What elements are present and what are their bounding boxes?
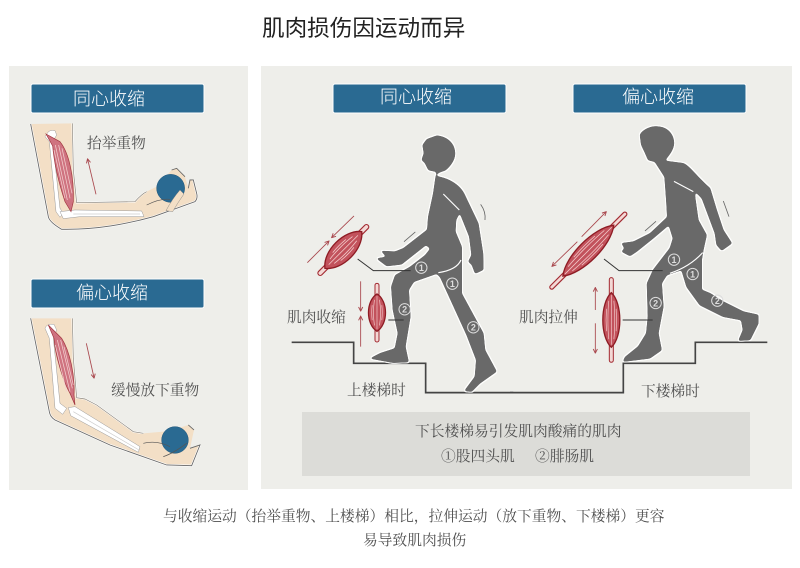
icon: arm lifting ball	[31, 123, 197, 229]
figure: descending stairs: 2	[715, 296, 720, 306]
title: 肌肉损伤因运动而异	[262, 16, 465, 41]
silhouette: man climbing	[369, 135, 497, 392]
humerus	[45, 130, 63, 217]
panel: stairs comparison	[261, 66, 792, 489]
muscle: calf stretched	[603, 278, 620, 362]
figure: climbing stairs	[292, 135, 513, 393]
label: slowly lower heavy object: 缓慢放下重物	[111, 379, 199, 400]
muscle: calf contracted	[368, 283, 385, 342]
callout: muscles sore after long descent: ②腓肠肌	[535, 445, 594, 466]
humerus	[45, 324, 67, 414]
panel: left arm comparison	[9, 66, 248, 490]
callout: muscles sore after long descent: 下长楼梯易引发肌肉酸痛的肌肉	[415, 420, 622, 441]
label: going upstairs: 上楼梯时	[347, 379, 406, 400]
badge: concentric contraction	[31, 84, 204, 113]
callout: muscles sore after long descent	[302, 412, 750, 476]
badge: eccentric contraction: 偏心收缩	[76, 283, 148, 303]
figure: climbing stairs: 1	[450, 279, 455, 289]
caption	[163, 505, 665, 550]
numbered markers	[650, 254, 723, 309]
label: lift heavy object: 抬举重物	[87, 132, 146, 153]
figure: descending stairs: 2	[653, 298, 658, 308]
forearm bones	[68, 407, 140, 452]
icon: blue ball	[157, 174, 185, 202]
badge: concentric contraction: 同心收缩	[73, 89, 145, 109]
badge: eccentric contraction	[31, 279, 204, 308]
figure: descending stairs: 1	[690, 269, 695, 279]
badge: eccentric contraction: 偏心收缩	[622, 87, 694, 107]
icon: arm lowering ball	[31, 318, 200, 466]
badge: concentric contraction: 同心收缩	[380, 87, 452, 107]
label: muscle stretch: 肌肉拉伸	[519, 306, 578, 327]
badge: eccentric contraction	[573, 84, 746, 113]
caption: 与收缩运动（抬举重物、上楼梯）相比，拉伸运动（放下重物、下楼梯）更容	[163, 505, 665, 526]
caption: 易导致肌肉损伤	[363, 529, 466, 550]
figure: descending stairs: 1	[671, 255, 676, 265]
numbered markers	[399, 262, 479, 333]
muscle: quadriceps stretched	[544, 206, 633, 295]
label: muscle contraction: 肌肉收缩	[287, 306, 346, 327]
stairs up	[292, 342, 513, 393]
badge: concentric contraction	[333, 84, 506, 113]
figure: climbing stairs: 1	[419, 263, 424, 273]
stairs down	[510, 342, 767, 393]
label: going downstairs: 下楼梯时	[641, 380, 700, 401]
figure: descending stairs	[510, 126, 767, 393]
figure: climbing stairs: 2	[471, 323, 476, 333]
icon: blue ball lowered	[162, 427, 188, 453]
callout: muscles sore after long descent: ①股四头肌	[441, 445, 515, 466]
silhouette: man descending	[621, 126, 759, 362]
figure: climbing stairs: 2	[402, 305, 407, 315]
muscle: quadriceps contracted	[311, 218, 375, 282]
forearm bones	[60, 210, 144, 219]
